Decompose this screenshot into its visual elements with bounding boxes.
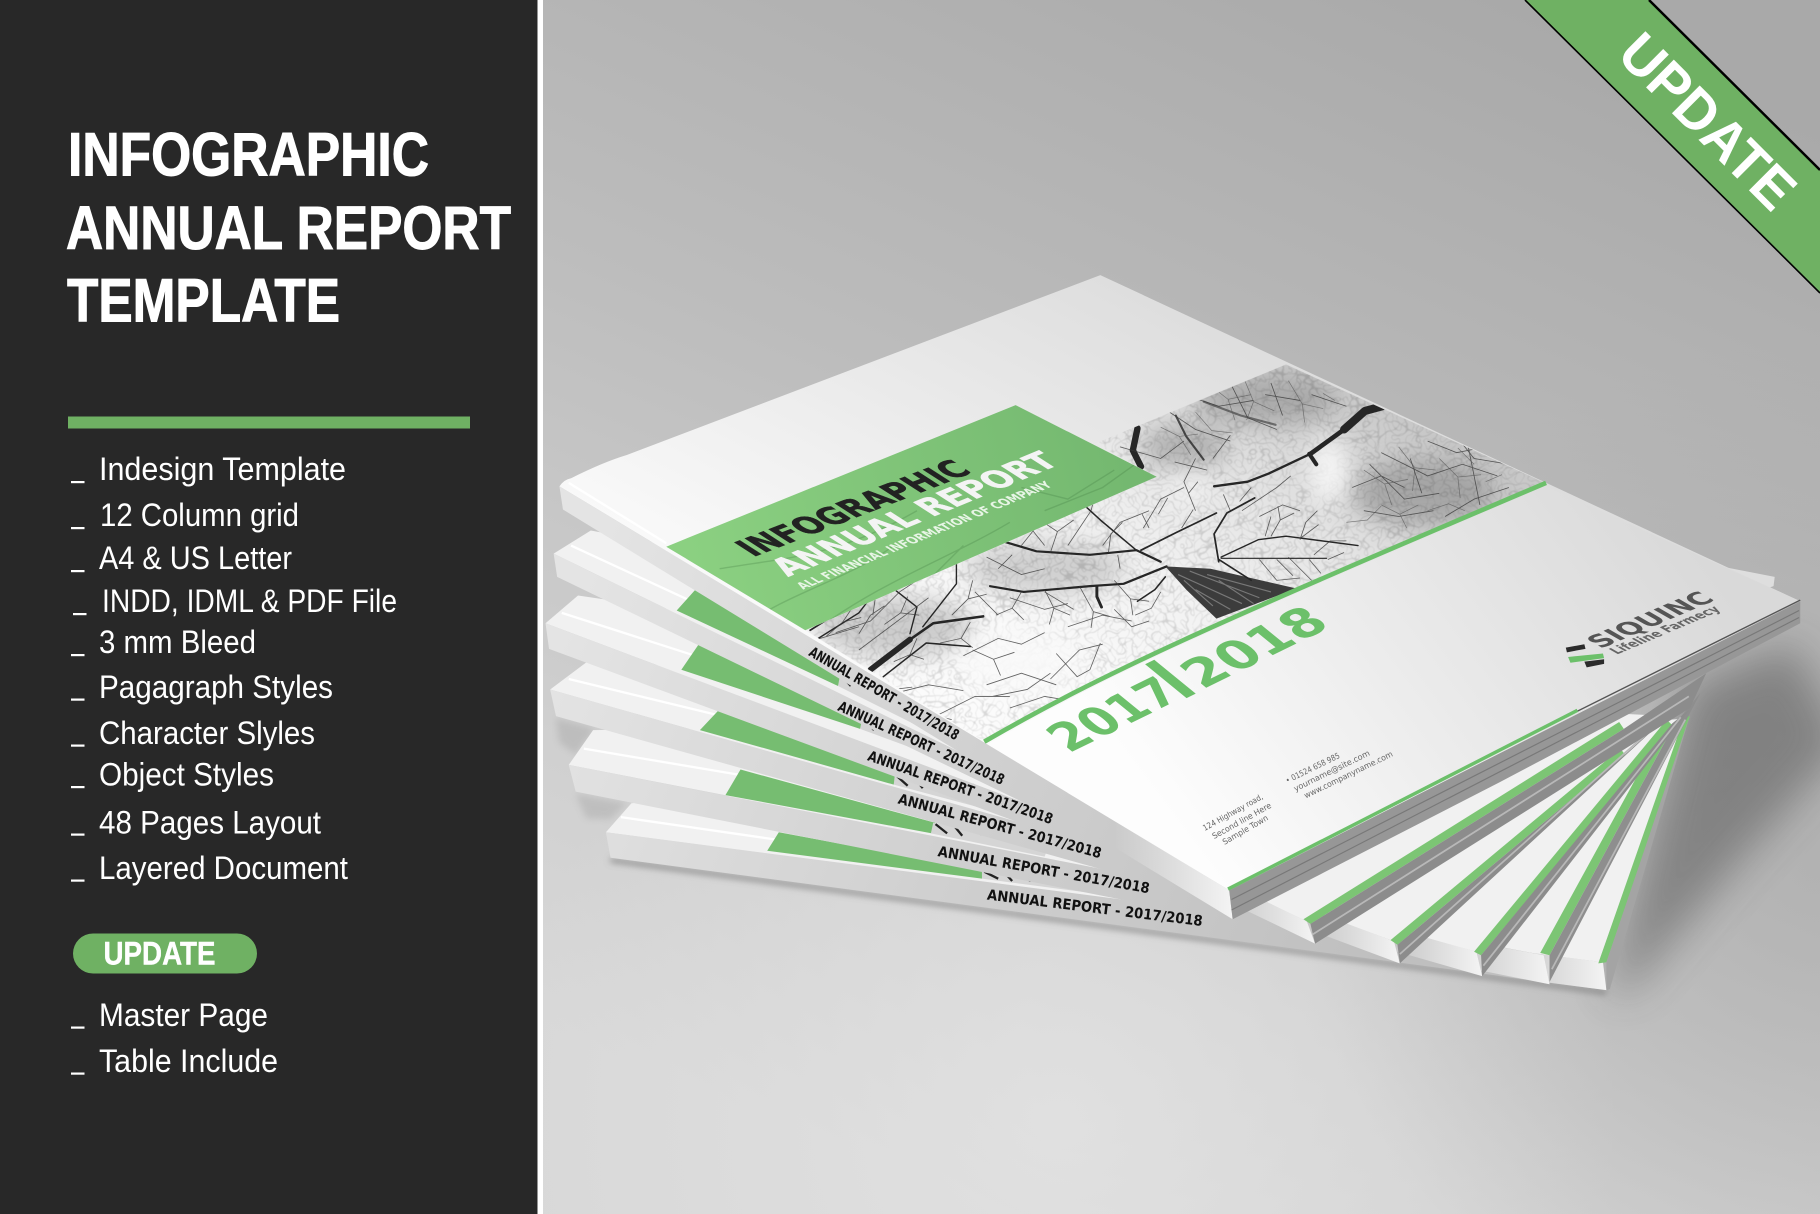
spine labels: ANNUAL REPORT - 2017/2018 <box>937 844 1151 897</box>
year <box>1034 597 1341 761</box>
branches showing through green <box>720 465 1134 620</box>
book 2 <box>554 530 1706 944</box>
fine twigs <box>812 383 1509 720</box>
book 6 <box>606 715 1690 990</box>
corner ribbon: UPDATE <box>1606 21 1808 223</box>
feature list: Indesign Template <box>99 451 346 487</box>
feature list: Pagagraph Styles <box>99 669 333 705</box>
book 4 <box>550 662 1690 976</box>
green title block <box>666 405 1157 630</box>
front pages <box>1229 601 1800 919</box>
feature list: 12 Column grid <box>100 497 299 533</box>
feature list: INDD, IDML & PDF File <box>102 583 397 619</box>
year: | <box>1137 654 1198 699</box>
book 5 <box>569 693 1700 984</box>
feature list: Layered Document <box>99 850 348 886</box>
stack of report books <box>546 275 1820 996</box>
cover title: INFOGRAPHIC <box>727 455 981 562</box>
contact details: Second line Here <box>1210 800 1273 841</box>
tree trunk <box>1165 566 1297 619</box>
feature list: Table Include <box>99 1043 278 1079</box>
contact details: • 01524 658 985 <box>1284 750 1341 785</box>
spine labels: ANNUAL REPORT - 2017/2018 <box>835 699 1007 789</box>
cover <box>559 275 1800 890</box>
logo: Lifeline Farmecy <box>1606 604 1725 657</box>
feature list: Character Slyles <box>99 715 315 751</box>
peeking back corner <box>1727 568 1775 598</box>
title <box>66 120 511 334</box>
thick limbs <box>810 402 1382 677</box>
year: 2017 <box>1034 668 1193 761</box>
feature list: Master Page <box>99 997 268 1033</box>
top book <box>559 275 1800 919</box>
corner ribbon <box>1525 0 1820 293</box>
feature list: 48 Pages Layout <box>99 804 321 840</box>
logo: SIQUINC <box>1580 588 1722 652</box>
bright sky patches <box>958 438 1348 692</box>
spine labels: ANNUAL REPORT - 2017/2018 <box>806 645 961 744</box>
spine labels: ANNUAL REPORT - 2017/2018 <box>986 888 1203 930</box>
photo background <box>543 0 1820 1214</box>
update pill <box>73 934 257 974</box>
spine labels: ANNUAL REPORT - 2017/2018 <box>896 792 1103 862</box>
left dark panel <box>0 0 543 1214</box>
contact details <box>1201 748 1394 847</box>
cover title: ANNUAL REPORT <box>762 447 1069 582</box>
feature list: Object Styles <box>99 756 274 792</box>
lower white band <box>987 486 1800 890</box>
contact details: Sample Town <box>1221 813 1270 847</box>
green curve <box>984 483 1546 742</box>
green divider bar <box>68 416 470 428</box>
list dashes <box>71 481 86 1075</box>
cover photo <box>789 348 1567 754</box>
cover title: ALL FINANCIAL INFORMATION OF COMPANY <box>793 479 1057 592</box>
contact details: 124 Highway road, <box>1201 791 1265 833</box>
feature list <box>99 451 397 1079</box>
book 3 <box>546 595 1697 963</box>
title: INFOGRAPHIC <box>68 120 429 188</box>
feature list: A4 & US Letter <box>99 540 292 576</box>
title: ANNUAL REPORT <box>66 194 511 262</box>
contact details: www.companyname.com <box>1302 749 1394 800</box>
spine labels: ANNUAL REPORT - 2017/2018 <box>865 749 1055 828</box>
title: TEMPLATE <box>67 266 340 334</box>
year: 2018 <box>1167 597 1341 697</box>
update pill: UPDATE <box>104 936 216 972</box>
feature list: 3 mm Bleed <box>99 624 256 660</box>
spine <box>559 486 1233 919</box>
out of focus tree masses <box>812 375 1494 659</box>
cast shadow <box>556 644 1820 996</box>
spine labels <box>806 645 1203 930</box>
contact details: yourname@site.com <box>1292 748 1371 793</box>
